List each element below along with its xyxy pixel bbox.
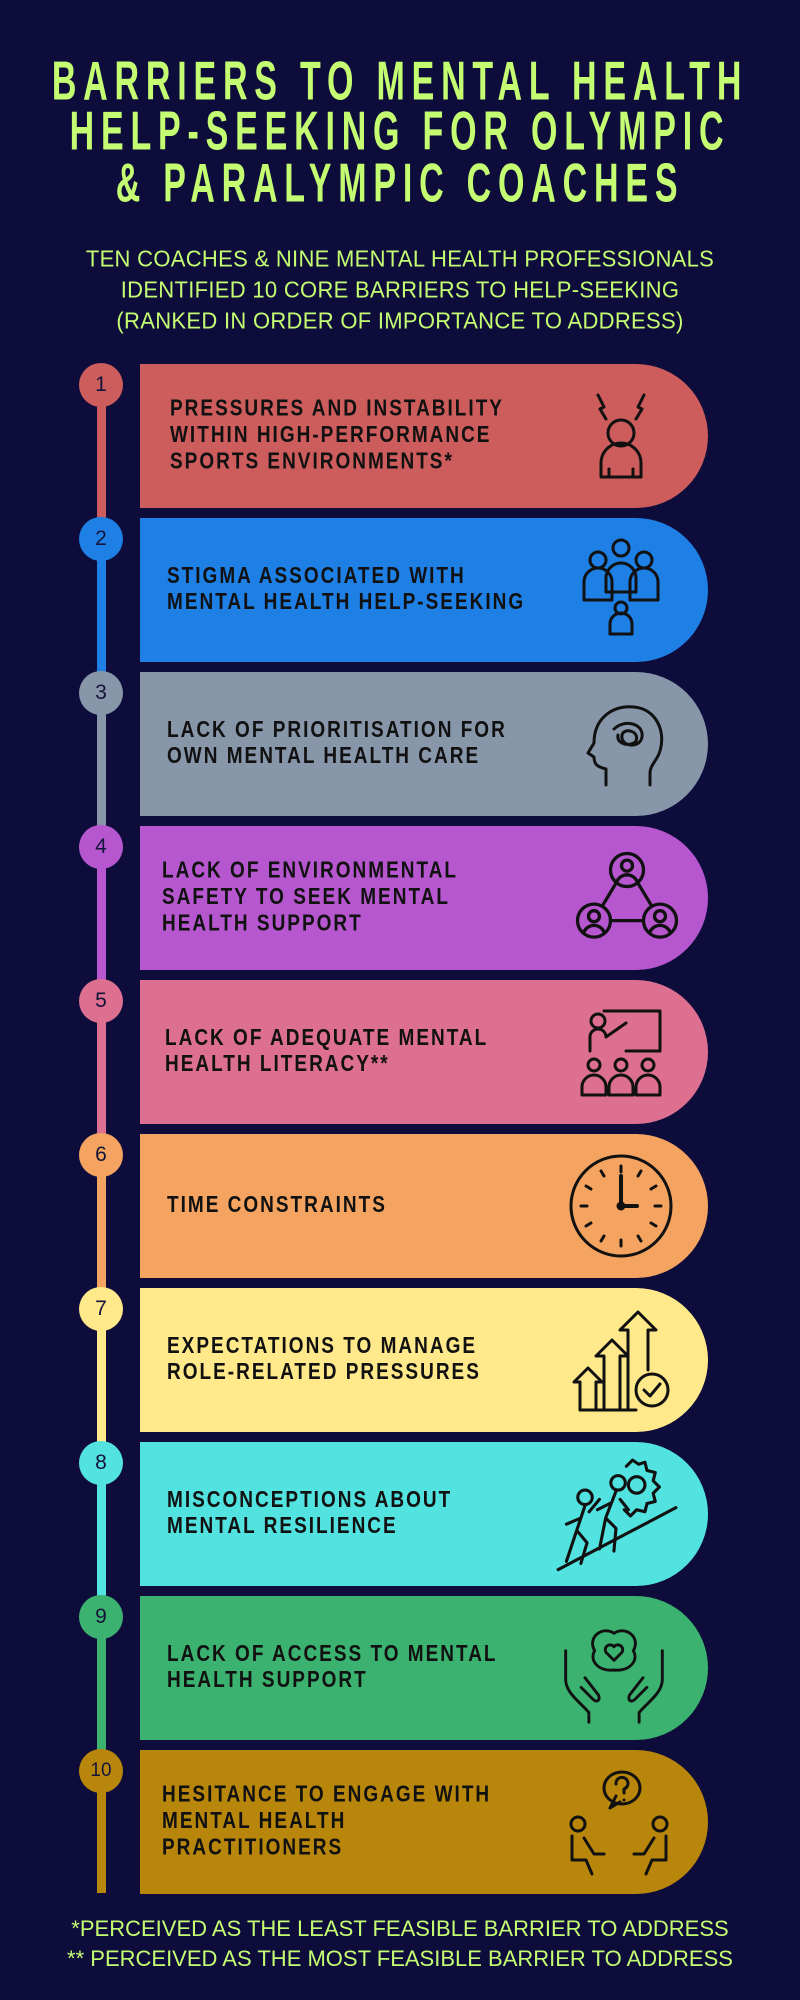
footnotes: *PERCEIVED AS THE LEAST FEASIBLE BARRIER TO ADDRESS bbox=[71, 1916, 729, 1941]
row 5 bbox=[140, 980, 708, 1124]
row 1: SPORTS ENVIRONMENTS* bbox=[170, 449, 454, 474]
circle 8 bbox=[79, 1441, 123, 1485]
circle 2: 2 bbox=[95, 527, 107, 550]
subtitle: (RANKED IN ORDER OF IMPORTANCE TO ADDRESS) bbox=[116, 307, 684, 334]
circle 1: 1 bbox=[95, 373, 107, 396]
row 1: WITHIN HIGH-PERFORMANCE bbox=[170, 423, 491, 448]
circle 6: 6 bbox=[95, 1143, 107, 1166]
circle 7: 7 bbox=[95, 1297, 107, 1320]
icon: group bbox=[582, 538, 660, 636]
circle 10: 10 bbox=[90, 1760, 112, 1781]
row 3: LACK OF PRIORITISATION FOR bbox=[167, 718, 507, 743]
footnotes: ** PERCEIVED AS THE MOST FEASIBLE BARRIER TO ADDRESS bbox=[67, 1946, 733, 1971]
icon: network of people bbox=[576, 852, 678, 939]
circle 8: 8 bbox=[95, 1451, 107, 1474]
subtitle: TEN COACHES & NINE MENTAL HEALTH PROFESSIONALS bbox=[86, 245, 714, 272]
row 3 bbox=[140, 672, 708, 816]
row 3: OWN MENTAL HEALTH CARE bbox=[167, 744, 480, 769]
row 1 bbox=[140, 364, 708, 508]
circle 4 bbox=[79, 825, 123, 869]
row 9: LACK OF ACCESS TO MENTAL bbox=[167, 1642, 498, 1667]
icon: classroom bbox=[580, 1010, 662, 1096]
circle 1 bbox=[79, 363, 123, 407]
icon: clock bbox=[570, 1154, 672, 1258]
row 7 bbox=[140, 1288, 708, 1432]
row 4 bbox=[140, 826, 708, 970]
row 2 bbox=[140, 518, 708, 662]
title bbox=[52, 52, 748, 214]
row 5: HEALTH LITERACY** bbox=[165, 1052, 390, 1077]
row 4: LACK OF ENVIRONMENTAL bbox=[162, 858, 458, 884]
row 7: EXPECTATIONS TO MANAGE bbox=[167, 1334, 477, 1359]
circle 4: 4 bbox=[95, 835, 107, 858]
icon: stressed person bbox=[596, 393, 646, 478]
circle 3: 3 bbox=[95, 681, 107, 704]
circle 9: 9 bbox=[95, 1605, 107, 1628]
row 5: LACK OF ADEQUATE MENTAL bbox=[165, 1026, 488, 1051]
circle 3 bbox=[79, 671, 123, 715]
row 10: PRACTITIONERS bbox=[162, 1835, 343, 1860]
row 10: HESITANCE TO ENGAGE WITH bbox=[162, 1782, 491, 1808]
row 6 bbox=[140, 1134, 708, 1278]
circle 6 bbox=[79, 1133, 123, 1177]
row 4: SAFETY TO SEEK MENTAL bbox=[162, 885, 450, 910]
title: BARRIERS TO MENTAL HEALTH bbox=[52, 52, 748, 112]
circle 2 bbox=[79, 517, 123, 561]
icon: counselling conversation bbox=[570, 1770, 668, 1876]
circle 7 bbox=[79, 1287, 123, 1331]
row 8: MENTAL RESILIENCE bbox=[167, 1514, 398, 1539]
icon: hands holding brain bbox=[564, 1629, 664, 1724]
row 2: STIGMA ASSOCIATED WITH bbox=[167, 564, 466, 589]
row 9: HEALTH SUPPORT bbox=[167, 1668, 368, 1693]
footnotes bbox=[67, 1916, 733, 1971]
row 10: MENTAL HEALTH bbox=[162, 1809, 346, 1834]
circle 5: 5 bbox=[95, 989, 107, 1012]
title: & PARALYMPIC COACHES bbox=[116, 154, 684, 214]
title: HELP-SEEKING FOR OLYMPIC bbox=[70, 102, 730, 162]
circle 5 bbox=[79, 979, 123, 1023]
row 1: PRESSURES AND INSTABILITY bbox=[170, 396, 504, 422]
row 9 bbox=[140, 1596, 708, 1740]
row 6: TIME CONSTRAINTS bbox=[167, 1193, 387, 1218]
row 8 bbox=[140, 1442, 708, 1586]
circle 10 bbox=[79, 1749, 123, 1793]
row 8: MISCONCEPTIONS ABOUT bbox=[167, 1488, 452, 1513]
icon: rising arrows with check bbox=[572, 1310, 670, 1412]
row 4: HEALTH SUPPORT bbox=[162, 911, 363, 936]
row 10 bbox=[140, 1750, 708, 1894]
subtitle bbox=[86, 245, 714, 334]
row 2: MENTAL HEALTH HELP-SEEKING bbox=[167, 590, 525, 615]
icon: head with tangled mind bbox=[586, 705, 664, 786]
subtitle: IDENTIFIED 10 CORE BARRIERS TO HELP-SEEKING bbox=[121, 276, 679, 303]
row 7: ROLE-RELATED PRESSURES bbox=[167, 1360, 481, 1385]
circle 9 bbox=[79, 1595, 123, 1639]
icon: climbers with gear bbox=[556, 1458, 678, 1572]
